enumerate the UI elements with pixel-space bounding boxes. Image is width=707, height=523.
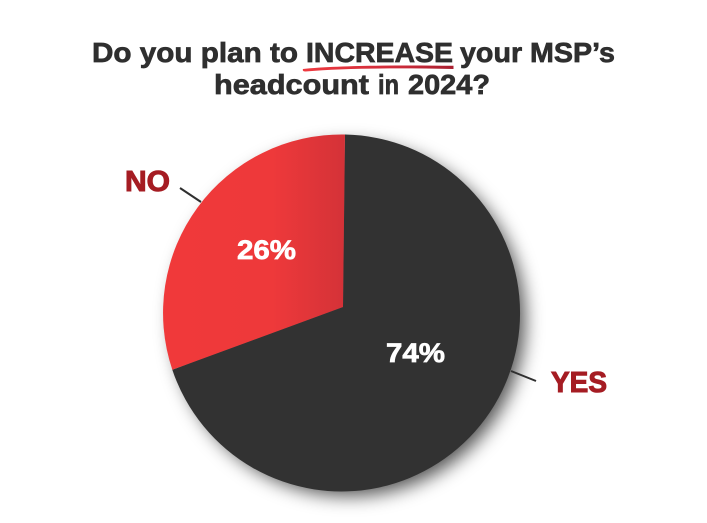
title [92,37,615,100]
title: in [378,69,399,100]
title: Do you plan to [92,37,298,68]
category label: NO: NO [125,166,170,198]
category label: YES: YES [551,367,607,399]
pie shadow [173,144,525,496]
title: 2024? [408,69,490,100]
leader line: YES [511,371,536,381]
icon: red underline stroke [303,65,454,72]
leader line: NO [180,188,201,202]
slice: yes 74% [172,134,520,491]
slice: no 26% [163,134,345,370]
title: headcount [214,69,369,100]
label: 26%: 26% [237,235,296,265]
label: 74%: 74% [386,338,445,368]
pie chart [163,134,525,496]
title: your MSP’s [460,37,615,68]
title: INCREASE [306,37,453,68]
